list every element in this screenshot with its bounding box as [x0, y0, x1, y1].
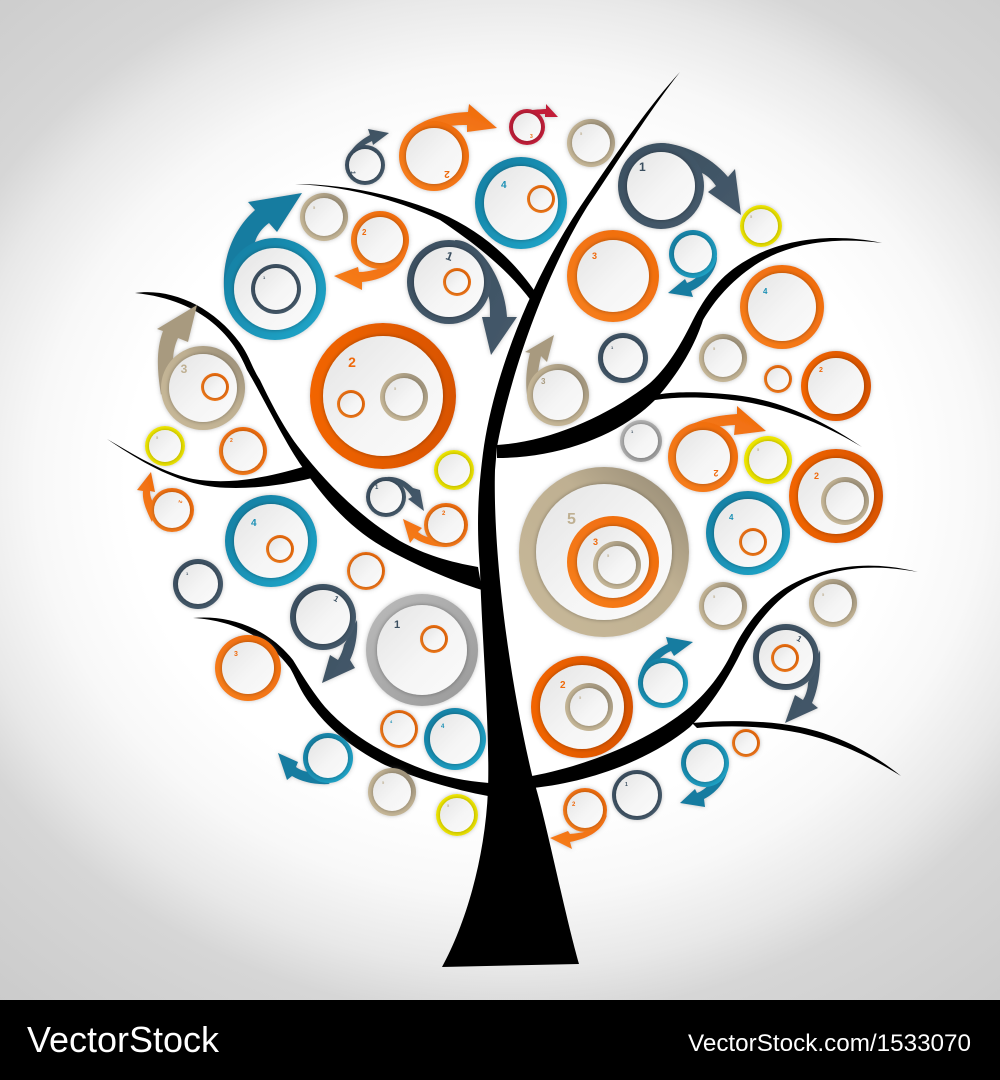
ring: small grey [620, 420, 662, 462]
ring: tan 3 with big up arrow [157, 305, 245, 430]
lower-left branch [193, 617, 489, 796]
ring: blue 4 right: 4 [729, 513, 734, 522]
ring: orange 3 lower left: 3 [234, 651, 238, 658]
footer brand name: VectorStock [27, 1019, 220, 1060]
ring: orange with arrow center [403, 503, 468, 547]
ring: navy 1 with arrow: 1 [639, 160, 646, 174]
ring: yellow right: 5 [757, 447, 760, 452]
tree silhouette [107, 72, 918, 967]
ring: orange 2 with arrow right: 2 [713, 468, 719, 478]
ring: yellow right [744, 436, 792, 484]
ring: large tan 5 with nested orange 3 and tan: 5 [607, 553, 610, 558]
left sub branch [107, 439, 312, 488]
ring: tan lower middle: 5 [713, 594, 716, 599]
ring: blue with big arrow and inner navy: 1 [263, 275, 266, 280]
ring: orange with arrow bottom: 2 [572, 802, 576, 808]
ring: orange 2 far right with inner tan: 2 [814, 471, 819, 481]
ring: yellow center [434, 450, 474, 490]
ring: blue 4 left: 4 [251, 518, 257, 529]
ring: orange with up arrow left [137, 472, 194, 532]
ring: tan top: 5 [580, 131, 583, 136]
ring: large orange 2 with two inner rings [310, 323, 456, 469]
ring: yellow left: 5 [156, 435, 159, 440]
ring: navy center right: 1 [611, 345, 614, 350]
ring: yellow top right [740, 205, 782, 247]
ring: tan center right: 5 [713, 346, 716, 351]
ring: orange 2 with arrow [399, 104, 497, 191]
ring: blue 4 bottom: 4 [441, 724, 445, 730]
ring: blue with arrow bottom right [680, 739, 729, 807]
ring: navy left: 1 [186, 571, 189, 576]
ring: orange 2 with arrow left: 2 [362, 228, 367, 237]
ring: large tan 5 with nested orange 3 and tan: 3 [593, 537, 598, 547]
ring: tan lower middle [699, 582, 747, 630]
ring: navy with down arrow lower left: 1 [332, 594, 341, 604]
ring: navy with arrow center [366, 477, 424, 517]
ring: orange left: 2 [230, 438, 233, 444]
ring: navy with small arrow [345, 129, 389, 185]
upper-right branch [497, 238, 882, 458]
ring: small orange bottom [380, 710, 418, 748]
ring: orange 3 [567, 230, 659, 322]
ring: large orange 2 with two inner rings: 2 [348, 354, 356, 370]
ring: orange 2 with arrow: 2 [444, 168, 450, 179]
ring: tan far right [809, 579, 857, 627]
ring: tan upper left [300, 193, 348, 241]
ring: navy 1 with big arrow and inner orange: 1 [444, 249, 455, 264]
ring: orange 2 with inner tan: 5 [579, 695, 582, 700]
ring: tan 3 with big up arrow: 3 [181, 362, 188, 376]
ring: navy with small arrow: 1 [349, 171, 355, 175]
ring: grey 1 with inner orange [366, 594, 478, 706]
ring: navy center right [598, 333, 648, 383]
footer image id: VectorStock.com/1533070 [688, 1030, 971, 1057]
ring: small orange center [347, 552, 385, 590]
ring: orange left [219, 427, 267, 475]
ring: large orange 2 with two inner rings: 5 [394, 386, 397, 391]
ring: orange 2 with inner tan: 2 [560, 680, 566, 691]
ring: tan 3 with up arrow: 3 [541, 377, 546, 386]
ring: blue 4 with inner orange: 4 [501, 180, 507, 191]
ring: blue 4 with inner orange [475, 157, 567, 249]
lower-right branch [532, 566, 918, 788]
ring: orange 2 right [801, 351, 871, 421]
footer bar [0, 1000, 1000, 1080]
ring: yellow bottom [436, 794, 478, 836]
trunk and main upward limb [442, 72, 680, 967]
ring: yellow top right: 5 [750, 214, 753, 219]
ring: blue 4 bottom [424, 708, 486, 770]
ring: red with arrow [509, 104, 558, 145]
ring: orange with arrow center: 2 [442, 511, 446, 517]
ring: orange 2 with arrow right [668, 406, 766, 492]
ring: orange 3 lower left [215, 635, 281, 701]
ring: yellow bottom: 5 [447, 803, 450, 808]
middle-right sub branch [648, 392, 862, 447]
ring: navy with arrow right: 1 [795, 634, 804, 644]
ring: small grey: 1 [631, 429, 634, 434]
ring: red with arrow: 3 [530, 134, 533, 140]
ring: tan center right [699, 334, 747, 382]
ring: large tan 5 with nested orange 3 and tan [519, 467, 689, 637]
ring: orange 2 with arrow left [334, 211, 409, 290]
ring: tan 3 with up arrow [525, 335, 589, 426]
ring: navy with arrow center: 1 [375, 485, 379, 491]
ring: blue with arrow bottom left [278, 733, 353, 784]
ring: navy 1 with arrow [618, 143, 741, 229]
ring: orange with label 4 [740, 265, 824, 349]
ring: orange 2 with inner tan [531, 656, 633, 758]
ring: navy 1 with big arrow and inner orange [407, 240, 517, 355]
ring: navy left [173, 559, 223, 609]
ring: navy bottom [612, 770, 662, 820]
left main branch [135, 292, 482, 590]
lower-right sub branch [692, 721, 901, 776]
ring: grey 1 with inner orange: 1 [394, 619, 400, 631]
ring: tan bottom [368, 768, 416, 816]
ring: tan bottom: 5 [382, 780, 385, 785]
ring: small orange bottom: 4 [390, 719, 393, 724]
ring: navy with arrow right [753, 624, 820, 723]
ring: tan top [567, 119, 615, 167]
ring: tan upper left: 5 [313, 205, 316, 210]
ring: orange with arrow bottom [550, 788, 607, 849]
ring: tan far right: 5 [822, 592, 825, 597]
upper-left branch [295, 184, 536, 302]
ring: blue with down arrow [668, 230, 717, 297]
ring: tiny orange right [764, 365, 792, 393]
ring: orange 3: 3 [592, 251, 597, 261]
ring: blue 4 left [225, 495, 317, 587]
ring: orange with up arrow left: 2 [177, 500, 183, 504]
ring: orange 2 right: 2 [819, 367, 823, 374]
ring: orange 2 far right with inner tan [789, 449, 883, 543]
ring: yellow left [145, 426, 185, 466]
ring: navy bottom: 1 [625, 782, 628, 788]
ring: tiny orange bottom right [732, 729, 760, 757]
ring: blue with arrow lower middle [638, 637, 693, 708]
ring: orange with label 4: 4 [763, 287, 768, 296]
ring: navy with down arrow lower left [290, 584, 357, 683]
ring: blue with big arrow and inner navy [224, 193, 326, 340]
ring: large tan 5 with nested orange 3 and tan: 5 [567, 511, 576, 528]
ring: blue 4 right [706, 491, 790, 575]
